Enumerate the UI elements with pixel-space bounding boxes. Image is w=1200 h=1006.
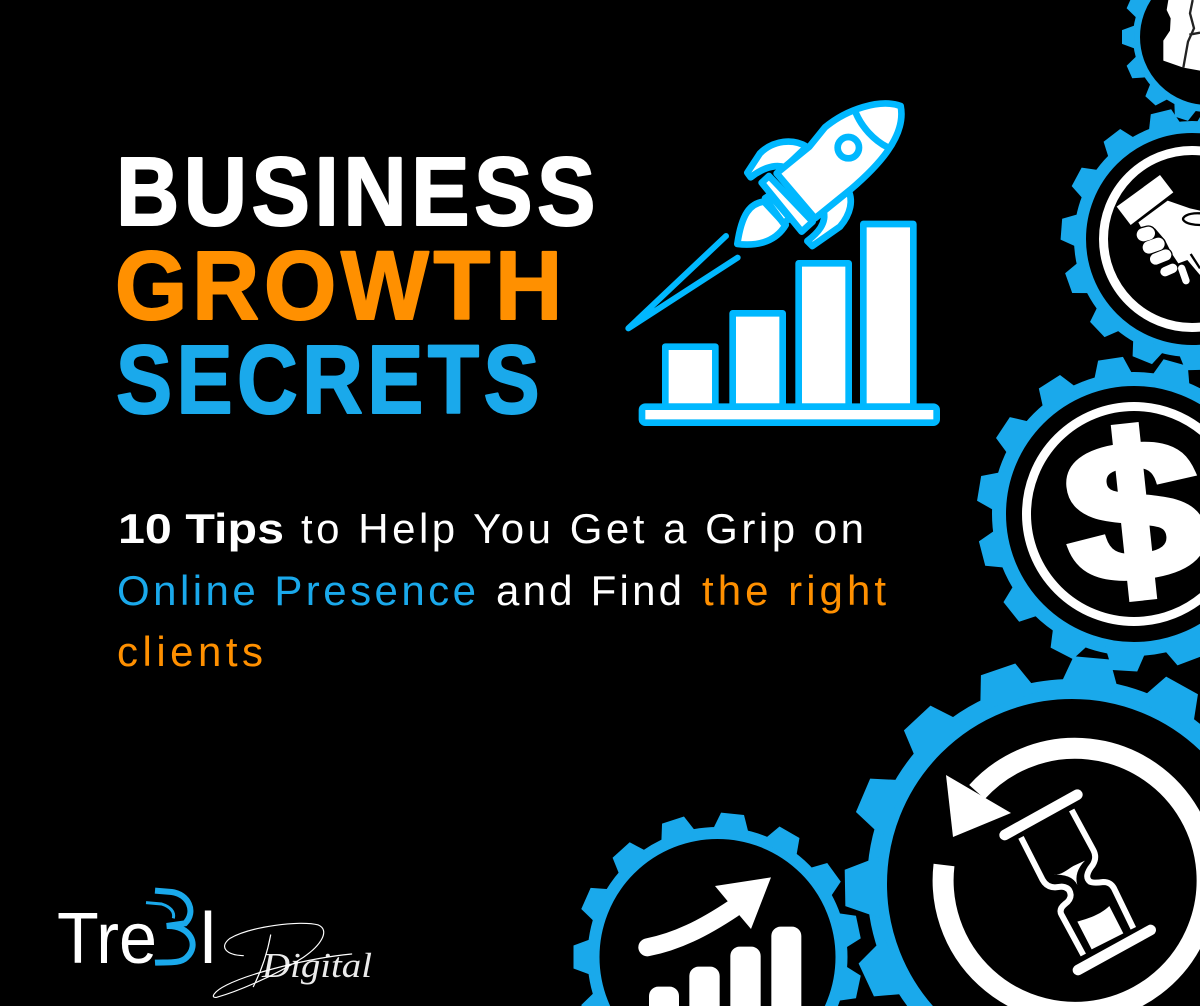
logo gradient line xyxy=(100,920,187,922)
icon: hourglass xyxy=(1005,795,1151,970)
subtitle last line: clients xyxy=(117,628,263,675)
gear: growth chart xyxy=(574,812,861,1006)
logo blue three xyxy=(146,891,193,963)
subtitle line one: to Help You Get a Grip on xyxy=(301,505,864,552)
circular arrow xyxy=(943,748,1200,1006)
title line: growth: GROWTH xyxy=(115,231,567,340)
white ring xyxy=(1104,150,1200,328)
title line: secrets: SECRETS xyxy=(116,325,544,434)
rocket trail xyxy=(628,236,738,328)
gear: hourglass xyxy=(844,656,1200,1006)
logo: Tre3l Digital xyxy=(57,891,372,997)
subtitle text xyxy=(117,505,886,675)
bar chart xyxy=(642,224,937,423)
subtitle orange phrase: the right xyxy=(702,567,886,614)
icon: rocket over bar chart xyxy=(628,104,937,423)
white ring xyxy=(1026,406,1200,622)
logo script word: Digital xyxy=(261,946,372,985)
subtitle blue phrase: Online Presence xyxy=(117,567,476,614)
logo script swash xyxy=(213,923,352,997)
subtitle connector: and Find xyxy=(496,567,682,614)
title line: business: BUSINESS xyxy=(116,137,600,246)
subtitle bold lead: 10 Tips xyxy=(118,505,284,552)
icon: people xyxy=(1163,0,1200,71)
logo letter l: l xyxy=(200,899,216,979)
gear: handshake xyxy=(1060,109,1200,370)
title xyxy=(115,137,600,434)
gear: team xyxy=(1122,0,1200,121)
icon: handshake xyxy=(1117,175,1200,281)
logo wordmark: Tre xyxy=(57,899,157,979)
icon: growth arrow and bars xyxy=(647,877,801,1006)
rocket xyxy=(737,104,901,246)
gear: dollar xyxy=(977,356,1200,672)
